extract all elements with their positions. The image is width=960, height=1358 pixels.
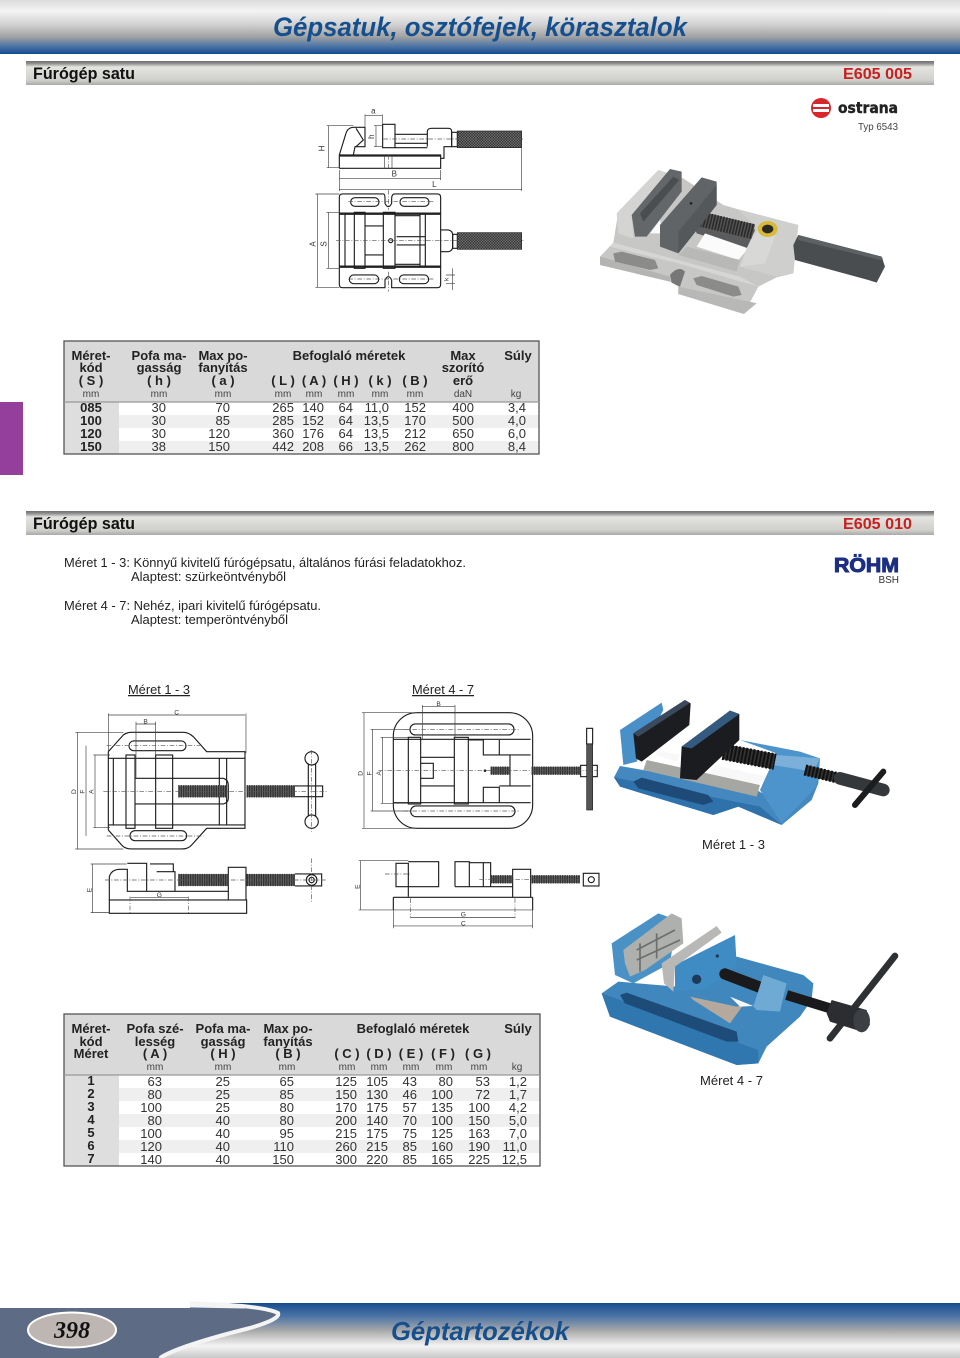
table rows: 135 [431,1100,453,1115]
table rows: 80 [148,1113,162,1128]
drawing label: Méret 4 - 7: Méret 4 - 7 [412,683,474,697]
side view dimensions: H [318,145,327,151]
table rows: 150 [272,1152,294,1167]
table rows: 25 [216,1074,230,1089]
table rows: 75 [403,1126,417,1141]
table rows: 64 [339,413,353,428]
plan view dimensions: D [71,789,78,794]
plan view [336,190,524,292]
table rows: 85 [280,1087,294,1102]
page title: Gépsatuk, osztófejek, körasztalok [273,12,689,42]
table rows: 40 [216,1139,230,1154]
table rows: 30 [152,413,166,428]
table header: mm [403,1062,419,1073]
screw [698,218,753,232]
table rows: 360 [272,426,294,441]
table rows: 220 [366,1152,388,1167]
table rows: 70 [216,400,230,415]
table header: kód [79,360,103,375]
table rows: 1,7 [509,1087,527,1102]
table rows: 100 [80,413,102,428]
table header: Méret- [71,348,111,363]
table header: mm [275,389,291,400]
purple side tab [0,402,23,475]
bed [690,997,743,1023]
table header [71,1021,532,1073]
table header: Max [450,348,476,363]
table background [64,341,539,454]
handle hub [827,1000,870,1032]
table rows: 70 [403,1113,417,1128]
plan view dimensions: A [308,241,317,247]
table header: mm [147,1062,163,1073]
table rows: 215 [366,1139,388,1154]
table rows: 125 [431,1126,453,1141]
rear body [612,913,677,983]
table header: szorító [442,360,484,375]
page number badge: 398 [53,1318,90,1344]
table rows: 285 [272,413,294,428]
side view [354,861,599,928]
table header: ( S ) [79,373,103,388]
plan view dimensions: A [89,789,96,794]
tommy bar [830,956,895,1038]
technical drawing: size 4-7 [354,701,599,928]
table rows: 163 [468,1126,490,1141]
table rows: 150 [335,1087,357,1102]
table rows: 110 [273,1139,294,1154]
table header: ( L ) [271,373,295,388]
second data table [64,1014,540,1167]
table rows: 11,0 [503,1139,527,1154]
table rows: 4,0 [508,413,526,428]
table rows: 085 [80,400,102,415]
table header: mm [407,389,423,400]
table rows: 800 [452,439,474,454]
pillar [740,740,820,823]
table rows [87,1073,527,1167]
side view dimensions: B [392,169,397,178]
plan view dimensions: S [319,241,328,247]
table rows: 140 [140,1152,162,1167]
technical drawing: side and plan view of vise 6543 [308,107,524,292]
table rows: 80 [280,1100,294,1115]
side view dimensions [318,107,522,191]
table rows: 442 [272,439,294,454]
description text: Alaptest: szürkeöntvényből [131,570,286,584]
table rows: 100 [468,1100,490,1115]
handle [840,778,883,790]
table header: Pofa ma- [132,348,186,363]
plan view dimensions [358,701,455,828]
photo: blue vise size 1-3 [614,700,883,825]
table rows: 175 [366,1126,388,1141]
table rows: 4 [87,1112,95,1127]
table header: mm [83,389,99,400]
cast base [614,758,820,825]
table header: mm [436,1062,452,1073]
table header: gasság [137,360,181,375]
moving jaw [660,177,717,253]
table rows: 25 [216,1087,230,1102]
table header: ( h ) [147,373,171,388]
table rows: 150 [208,439,230,454]
table rows: 57 [403,1100,417,1115]
table rows: 170 [335,1100,357,1115]
table rows: 43 [403,1074,417,1089]
table header: mm [471,1062,487,1073]
table header: lesség [135,1034,175,1049]
table rows: 38 [152,439,166,454]
side view dimensions: a [371,107,376,116]
table rows: 40 [216,1126,230,1141]
page number badge [28,1312,116,1348]
table header: Max po- [198,348,248,363]
table header: mm [338,389,354,400]
description text [64,556,466,627]
table rows: 95 [280,1126,294,1141]
first data table [64,341,539,454]
table rows: 100 [140,1126,162,1141]
table rows: 66 [339,439,353,454]
handle [793,235,885,283]
table rows: 260 [335,1139,357,1154]
table rows: 170 [404,413,426,428]
table header: mm [279,1062,295,1073]
side view: C [461,920,466,927]
side view: G [157,892,162,899]
plan view [378,713,598,828]
table rows: 3,4 [508,400,526,415]
table header: ( H ) [210,1046,236,1061]
table rows: 100 [431,1113,453,1128]
table header: erő [453,373,473,388]
table rows: 80 [280,1113,294,1128]
table rows: 72 [476,1087,490,1102]
table header: mm [215,1062,231,1073]
table header: kg [511,389,521,400]
table rows [80,400,526,454]
slots [613,252,658,270]
table rows: 7 [87,1151,95,1166]
table rows: 63 [148,1074,162,1089]
table rows: 4,2 [509,1100,527,1115]
table rows: 120 [80,426,102,441]
table header [71,348,532,400]
cast base [600,170,798,314]
table rows: 215 [335,1126,357,1141]
section bar: Fúrógép satu E605 005 [26,61,934,85]
rear body [620,703,663,765]
side view: E [86,887,93,892]
plan view dimensions [308,194,455,290]
table rows: 6,0 [508,426,526,441]
table header: Befoglaló méretek [293,348,406,363]
photo: grey drill press vise [600,169,885,314]
table header: mm [151,389,167,400]
table rows: 650 [452,426,474,441]
gold badge [758,221,778,237]
table rows: 200 [335,1113,357,1128]
table header: Pofa ma- [196,1021,250,1036]
page header band [0,0,960,54]
table rows: 140 [366,1113,388,1128]
table rows: 40 [216,1113,230,1128]
fixed jaw [632,169,682,237]
table rows: 176 [302,426,324,441]
plan view dimensions: k [444,277,451,281]
section bar: Fúrógép satu E605 010: Fúrógép satu [33,515,135,533]
footer slate swoosh [0,1303,278,1358]
table header: fanyítás [198,360,248,375]
table rows: 5,0 [509,1113,527,1128]
table rows: 140 [302,400,324,415]
table rows: 6 [87,1138,95,1153]
table rows: 265 [272,400,294,415]
table rows: 2 [87,1086,95,1101]
description text: Alaptest: temperöntvényből [131,613,288,627]
table rows: 65 [280,1074,294,1089]
table rows: 150 [468,1113,490,1128]
plan view dimensions [71,709,246,849]
table rows: 13,5 [364,413,389,428]
table rows: 64 [339,400,353,415]
table header: ( a ) [211,373,235,388]
table rows: 208 [302,439,324,454]
table header: kg [512,1062,522,1073]
table rows: 150 [80,439,102,454]
table rows: 125 [335,1074,357,1089]
table header: ( A ) [143,1046,167,1061]
technical drawing: size 1-3 [71,709,327,913]
table header: ( E ) [399,1046,423,1061]
table header: Méret- [71,1021,111,1036]
logo: Röhm BSH [834,554,899,586]
table rows: 1 [87,1073,95,1088]
table rows: 53 [476,1074,490,1089]
table header: ( B ) [402,373,428,388]
table header: Befoglaló méretek [357,1021,470,1036]
description text: Méret 1 - 3: Könnyű kivitelű fúrógépsatu, általános fúrási feladatokhoz. [64,556,466,570]
table rows: 3 [87,1099,95,1114]
photo caption: Méret 1 - 3: Méret 1 - 3 [702,838,765,852]
plan view [103,732,327,849]
table rows: 80 [148,1087,162,1102]
table header: Súly [504,348,532,363]
table header: ( B ) [275,1046,301,1061]
table header: Súly [504,1021,532,1036]
table rows: 130 [366,1087,388,1102]
table header: ( H ) [333,373,359,388]
fixed jaw [633,700,691,762]
section bar: Fúrógép satu E605 010 [26,511,934,535]
table header: mm [215,389,231,400]
table header: ( D ) [366,1046,392,1061]
page footer band [0,1302,960,1358]
table header: mm [339,1062,355,1073]
table rows: 105 [366,1074,388,1089]
table rows: 40 [216,1152,230,1167]
table header: ( A ) [302,373,326,388]
section bar: Fúrógép satu E605 005: Fúrógép satu [33,65,135,83]
table header: ( k ) [368,373,392,388]
table rows: 400 [452,400,474,415]
table rows: 175 [366,1100,388,1115]
side view: E [354,884,361,889]
table rows: 100 [140,1100,162,1115]
table background [64,1014,540,1166]
footer title: Géptartozékok [391,1316,571,1346]
table rows: 500 [452,413,474,428]
photo caption: Méret 4 - 7: Méret 4 - 7 [700,1074,763,1088]
serrated fixed jaw [623,913,683,977]
table rows: 262 [404,439,426,454]
table rows: 120 [208,426,230,441]
cast base [602,957,813,1065]
section bar: Fúrógép satu E605 010: E605 010 [843,516,912,533]
table rows: 85 [403,1139,417,1154]
table rows: 13,5 [364,439,389,454]
pillar [738,210,798,277]
table rows: 225 [468,1152,490,1167]
side view dimensions: L [432,180,437,189]
table rows: 160 [431,1139,453,1154]
table rows: 85 [216,413,230,428]
table rows: 8,4 [508,439,526,454]
table rows: 64 [339,426,353,441]
description text: Méret 4 - 7: Nehéz, ipari kivitelű fúrógépsatu. [64,599,321,613]
side view dimensions: h [367,134,376,139]
side view: G [461,912,466,919]
plan view dimensions: F [80,790,87,794]
plan view dimensions: F [366,771,373,775]
table header: mm [306,389,322,400]
table rows: 30 [152,400,166,415]
table rows: 190 [468,1139,490,1154]
table header: Max po- [263,1021,313,1036]
table header: Méret [74,1046,109,1061]
bed and opening [690,213,757,250]
table header: fanyítás [263,1034,313,1049]
table rows: 80 [439,1074,453,1089]
table header: gasság [201,1034,245,1049]
plan view dimensions: C [174,709,179,716]
plan view dimensions: D [358,771,365,776]
moving jaw [680,711,739,780]
table rows: 13,5 [364,426,389,441]
drawing label: Méret 1 - 3: Méret 1 - 3 [128,683,190,697]
table header: ( F ) [431,1046,455,1061]
screw rear [725,974,760,987]
table rows: 152 [302,413,324,428]
table header: Pofa szé- [126,1021,184,1036]
table header: ( C ) [334,1046,360,1061]
logo: Röhm BSH: BSH [878,575,899,586]
table rows: 1,2 [509,1074,527,1089]
table rows: 212 [404,426,426,441]
pillar [753,975,787,1012]
table rows: 152 [404,400,426,415]
table rows: 85 [403,1152,417,1167]
table header: mm [372,389,388,400]
logo: Röhm BSH: RÖHM [834,554,899,577]
section bar: Fúrógép satu E605 005: E605 005 [843,66,912,83]
screw front [787,995,830,1008]
table rows: 30 [152,426,166,441]
logo: ostrana: Typ 6543 [858,122,898,133]
table rows: 100 [431,1087,453,1102]
plan view dimensions: A [376,771,383,776]
side view [339,124,524,169]
side view [86,858,327,913]
table rows: 300 [335,1152,357,1167]
logo: ostrana [811,98,898,133]
plan view dimensions: B [143,718,148,725]
photo: blue vise size 4-7 [602,913,895,1065]
table rows: 5 [87,1125,95,1140]
table header: daN [454,389,472,400]
table rows: 46 [403,1087,417,1102]
plan view dimensions: B [436,701,441,708]
table rows: 11,0 [365,400,389,415]
table header: mm [371,1062,387,1073]
table rows: 25 [216,1100,230,1115]
table header: kód [79,1034,103,1049]
logo: ostrana: ostrana [838,99,898,117]
table rows: 165 [431,1152,453,1167]
screw [723,752,775,762]
table rows: 7,0 [509,1126,527,1141]
moving jaw [675,935,737,992]
table rows: 120 [140,1139,162,1154]
table rows: 12,5 [502,1152,527,1167]
table header: ( G ) [465,1046,491,1061]
